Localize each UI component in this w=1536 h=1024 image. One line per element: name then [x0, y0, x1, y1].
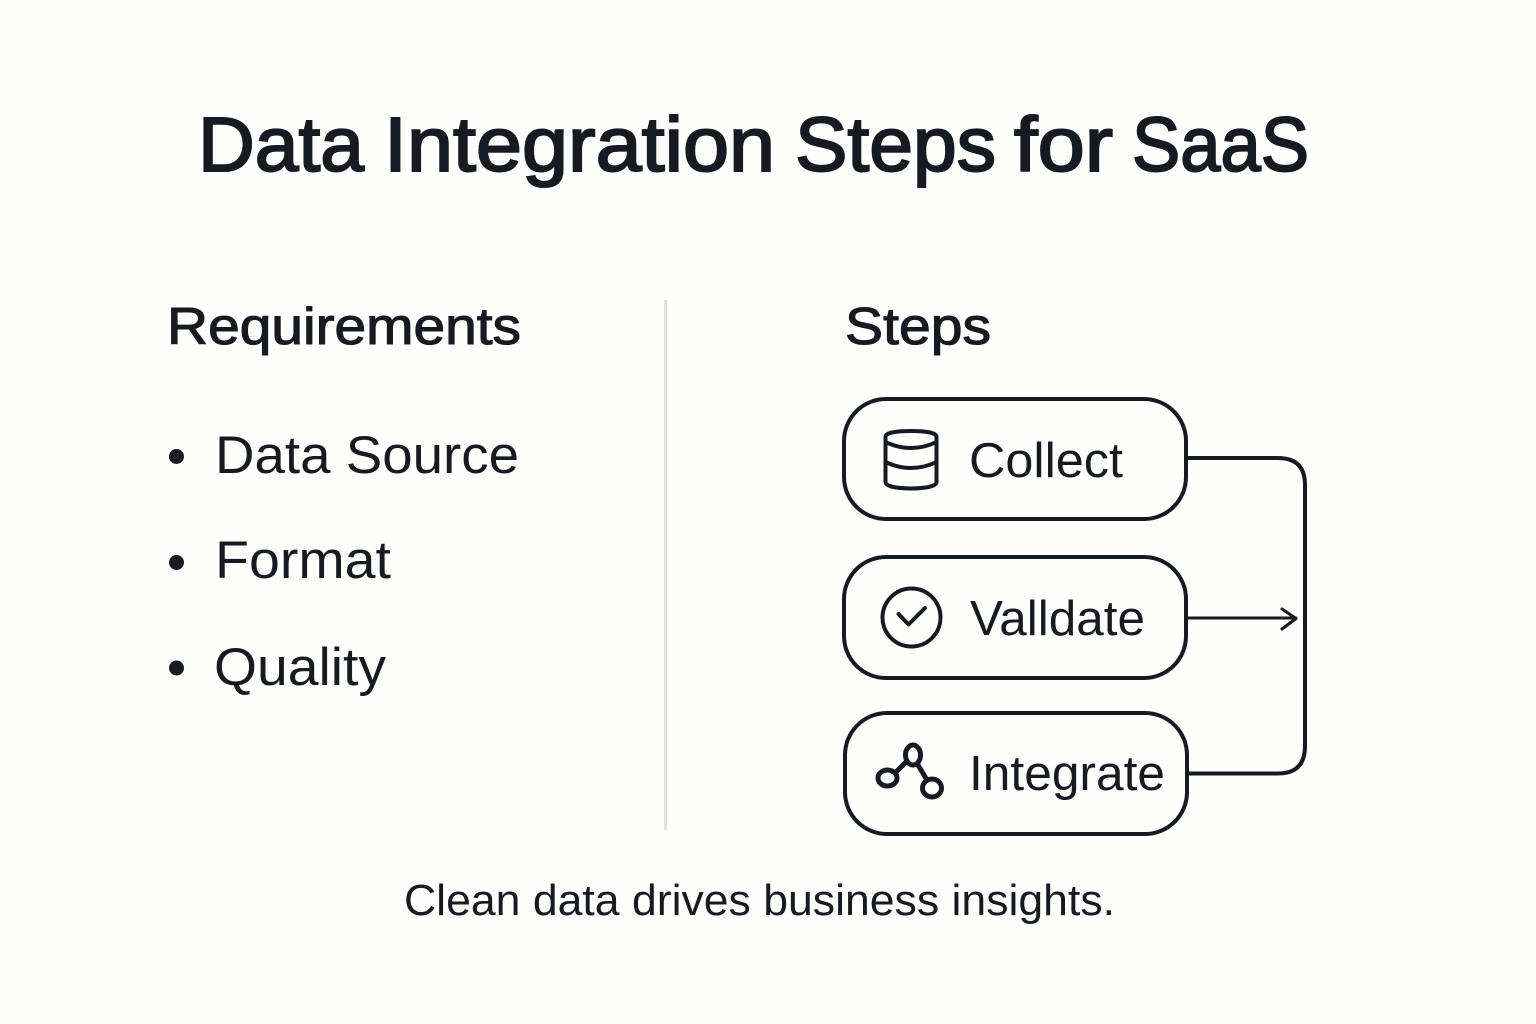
step: validate: Valldate — [970, 592, 1145, 646]
arrow: validate to bracket — [1187, 609, 1296, 629]
step: validate — [844, 557, 1186, 678]
title: for — [1014, 102, 1113, 188]
caption: Clean data drives business insights. — [404, 876, 1115, 925]
icon: connected nodes — [878, 745, 942, 797]
title: SaaS — [1132, 102, 1309, 188]
connector: collect and integrate bracket — [1187, 458, 1305, 774]
panel: requirements — [167, 298, 521, 697]
title: Data — [198, 102, 364, 188]
step: collect: Collect — [969, 434, 1123, 488]
list item: data source: Data Source — [215, 426, 519, 485]
step: integrate — [845, 713, 1187, 834]
title — [198, 102, 1309, 188]
heading: requirements: Requirements — [167, 298, 521, 356]
icon: check circle — [882, 588, 940, 646]
icon: database — [886, 431, 936, 488]
step: collect — [844, 399, 1186, 519]
list item: format: Format — [215, 531, 391, 590]
step: integrate: Integrate — [969, 747, 1165, 801]
title: Steps — [795, 102, 996, 188]
heading: steps: Steps — [845, 298, 991, 356]
title: Integration — [384, 102, 775, 188]
list item: quality: Quality — [214, 638, 387, 697]
panel: steps — [844, 298, 1305, 834]
